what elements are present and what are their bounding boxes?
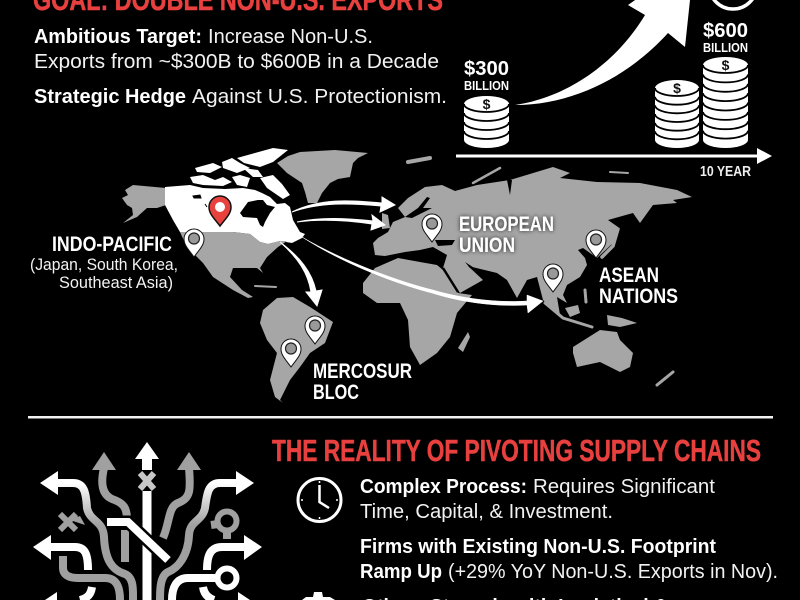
text block: firms with footprint: Firms with Existing Non-U.S. Footprint: [360, 536, 716, 558]
pin: east asia: [586, 230, 606, 258]
new guinea: [607, 315, 637, 327]
diagonal stem: [107, 522, 168, 560]
label: indo-pacific: INDO-PACIFIC: [52, 233, 172, 256]
new zealand, japan, sumatra, philippines and islands: [255, 158, 673, 385]
africa: [363, 258, 472, 365]
borneo: [565, 305, 580, 317]
pin: indo-pacific: [184, 229, 204, 257]
icon: tall coin stack: [703, 57, 748, 148]
x mark left: [60, 514, 76, 530]
label: 10 year: 10 YEAR: [700, 163, 751, 180]
mixed branch left: [57, 483, 133, 600]
label: $600 billion: $600: [703, 20, 748, 42]
growth chart: coins and arrow: [456, 0, 772, 180]
text block: goal details: Exports from ~$300B to $600B in a Decade: [34, 51, 439, 73]
south america: [260, 297, 333, 403]
label: european union: [459, 213, 554, 257]
text block: firms with footprint: (+29% YoY Non-U.S. Exports in Nov).: [448, 561, 778, 583]
text block: firms with footprint: [360, 536, 778, 583]
icon: clock: [298, 478, 341, 522]
arrow: time axis: [456, 148, 772, 164]
pin: brazil: [305, 316, 325, 344]
usa and central america: [180, 232, 287, 298]
label: mercosur bloc: [313, 360, 412, 404]
text block: goal details: Increase Non-U.S.: [208, 26, 373, 48]
grey branches: [63, 468, 190, 600]
icon: small coin stack: $: [483, 96, 491, 112]
arrow: to mercosur: [280, 242, 322, 306]
icon: medium coin stack: $: [673, 80, 681, 96]
label: $600 billion: [703, 20, 748, 55]
label: asean nations: [599, 264, 678, 308]
pin: southeast asia: [543, 264, 563, 292]
text block: complex process: Requires Significant: [533, 476, 715, 498]
pin: argentina: [281, 339, 301, 367]
greenland: [277, 150, 368, 203]
text block: complex process: Complex Process:: [360, 476, 527, 498]
britain: [382, 213, 390, 229]
label: indo-pacific: (Japan, South Korea,: [30, 255, 178, 274]
text block: goal details: [34, 26, 447, 108]
text block: complex process: [360, 476, 715, 523]
label: european union: EUROPEAN: [459, 213, 554, 236]
label: asean nations: ASEAN: [599, 264, 659, 287]
label: $300 billion: $300: [464, 58, 509, 80]
label: european union: UNION: [459, 234, 515, 257]
center stem: [142, 491, 152, 600]
lower right branch: [207, 547, 245, 570]
madagascar: [458, 332, 470, 352]
icon: branching supply chain: [33, 442, 262, 600]
arrow: to europe south: [297, 215, 385, 230]
arrowheads: [33, 442, 262, 600]
text block: goal details: Strategic Hedge: [34, 86, 186, 108]
pin: canada red: [209, 196, 231, 226]
australia: [573, 330, 633, 372]
label: indo-pacific: Southeast Asia): [59, 273, 173, 292]
text block: firms with footprint: Ramp Up: [360, 561, 442, 583]
lower left branch: [50, 547, 88, 570]
circle node grey: [218, 512, 236, 530]
icon: circle cut off at top: [709, 0, 757, 9]
text block: complex process: Time, Capital, & Investment.: [360, 501, 613, 523]
icon: gear: [302, 592, 335, 600]
inland seas and gulfs: [405, 180, 512, 273]
label: $300 billion: BILLION: [464, 78, 509, 93]
label: asean nations: NATIONS: [599, 285, 678, 308]
growth arrow: [515, 0, 695, 105]
circle node white: [218, 568, 236, 588]
lollipop node white: [172, 578, 218, 600]
label: $600 billion: BILLION: [703, 40, 748, 55]
arrow: to asean: [302, 237, 543, 313]
label: mercosur bloc: MERCOSUR: [313, 360, 412, 383]
bottom right branch: [203, 587, 214, 600]
eurasia: [373, 167, 692, 315]
label: indo-pacific: [30, 233, 178, 292]
arrow: to europe north: [292, 197, 395, 212]
canada highlighted: [165, 148, 305, 244]
icon: tall coin stack: $: [722, 57, 730, 73]
label: $300 billion: [464, 58, 509, 93]
x mark center: [140, 473, 154, 489]
text block: goal details: Ambitious Target:: [34, 26, 202, 48]
red sea: [443, 268, 458, 292]
text block: goal details: Against U.S. Protectionism.: [192, 86, 447, 108]
icon: medium coin stack: [655, 80, 699, 148]
node stem and wedge: [211, 524, 227, 539]
label: mercosur bloc: BLOC: [313, 381, 359, 404]
world map: [122, 148, 692, 403]
mixed branch right: [160, 483, 237, 600]
icon: small coin stack: [464, 96, 509, 148]
alaska: [122, 185, 166, 223]
bottom left branch: [80, 587, 92, 600]
pin: europe: [422, 214, 442, 242]
